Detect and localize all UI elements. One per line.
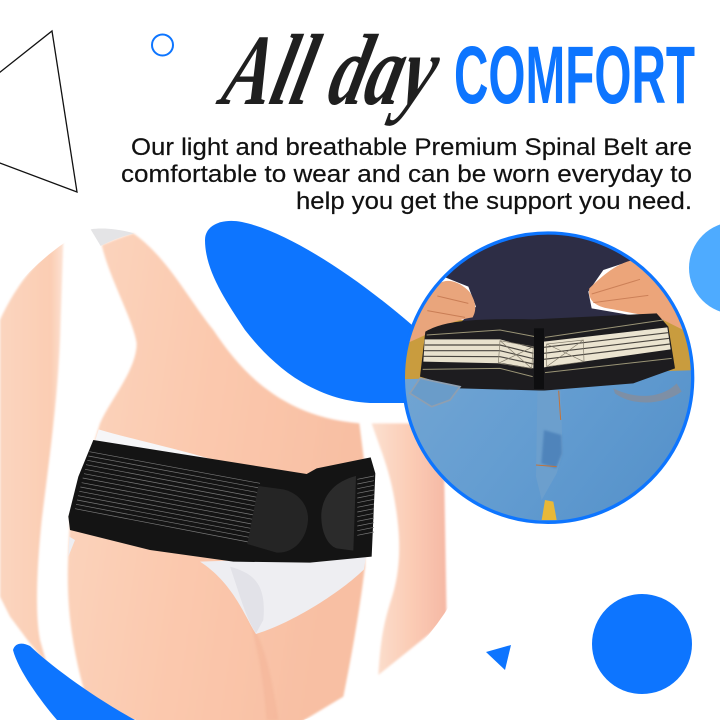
left hand	[407, 281, 475, 343]
blue leaf shape	[205, 221, 412, 403]
belt black edges	[420, 313, 675, 391]
thigh crease shading	[255, 636, 276, 717]
decorative outlined triangle	[0, 31, 77, 192]
belt cream panel right	[544, 327, 671, 367]
small blue ring	[152, 34, 173, 56]
belt cream panel left	[423, 339, 534, 368]
belt olive stitching	[423, 320, 672, 377]
shirt	[446, 234, 630, 322]
belt centre strap	[534, 328, 544, 389]
right pocket	[613, 383, 682, 403]
light blue circle	[689, 222, 720, 314]
right arm	[372, 423, 447, 675]
inset photo background	[404, 234, 692, 522]
belt stripes	[75, 452, 374, 542]
zip tab	[542, 500, 557, 520]
title script: All day: All day	[209, 14, 452, 126]
left velcro pad	[247, 486, 308, 553]
underwear shading	[230, 567, 264, 633]
photo: torso wearing black belt	[0, 229, 447, 720]
blue circle	[592, 594, 692, 694]
jeans	[400, 370, 700, 527]
belt X stitching	[498, 340, 584, 368]
fly stitching	[536, 391, 561, 467]
fly dark fold	[541, 430, 562, 468]
belt band	[68, 440, 375, 563]
right finger lines	[592, 279, 648, 303]
yellow backdrop	[405, 320, 691, 380]
underwear	[68, 537, 366, 634]
title	[209, 14, 695, 126]
small blue triangle	[486, 645, 511, 670]
right hand	[589, 260, 683, 330]
description text: comfortable to wear and can be worn everyday to	[121, 161, 692, 188]
left pocket	[410, 378, 460, 407]
left finger lines	[427, 296, 468, 317]
inset photo circle	[400, 227, 700, 527]
jeans fly	[536, 391, 563, 500]
bra strap	[91, 229, 134, 246]
description text	[121, 134, 692, 215]
inset blue ring	[403, 233, 693, 522]
bottom-left blue swoosh	[13, 644, 135, 720]
right velcro pad	[321, 476, 356, 551]
belt stripes	[423, 333, 670, 364]
waistband above belt	[95, 430, 208, 458]
description text: help you get the support you need.	[296, 188, 692, 215]
left arm	[0, 240, 63, 663]
torso and thighs	[68, 233, 365, 720]
description text: Our light and breathable Premium Spinal Belt are	[131, 134, 692, 161]
